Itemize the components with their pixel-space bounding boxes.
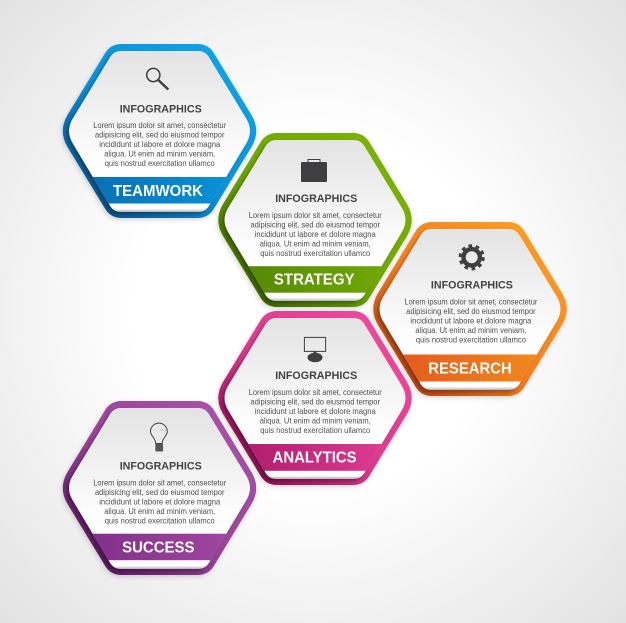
inner shadow [222,320,403,482]
body text: aliqua. Ut enim ad minim veniam, [260,239,371,248]
icon: magnifier [147,68,168,90]
ribbon [92,534,226,560]
icon: briefcase [301,160,327,182]
inner shadow [66,410,248,572]
body text: quis nostrud exercitation ullamco [105,517,215,526]
body text: quis nostrud exercitation ullamco [260,426,371,435]
inner shadow [66,54,248,214]
heading: INFOGRAPHICS [120,461,202,473]
heading: INFOGRAPHICS [120,104,202,116]
inner shadow [222,142,403,304]
inner card [69,408,250,569]
body text: Lorem ipsum dolor sit amet, consectetur [93,121,227,130]
body text: incididunt ut labore et dolore magna [255,230,376,239]
body text: incididunt ut labore et dolore magna [255,407,376,416]
body text: adipisicing elit, sed do eiusmod tempor [250,398,380,406]
body text: quis nostrud exercitation ullamco [416,336,526,345]
body text: incididunt ut labore et dolore magna [99,498,221,506]
body text: Lorem ipsum dolor sit amet, consectetur [93,478,227,488]
ribbon label: RESEARCH [428,361,512,378]
panel: success hexagon [60,401,260,575]
panel: strategy hexagon [215,133,415,307]
icon: gear [460,246,483,269]
hexagon frame [218,133,412,307]
body text: adipisicing elit, sed do eiusmod tempor [406,307,536,316]
body text: quis nostrud exercitation ullamco [260,249,371,258]
body text: aliqua. Ut enim ad minim veniam, [104,150,215,159]
hexagon frame [63,401,256,575]
ribbon label: TEAMWORK [113,183,204,200]
body text: incididunt ut labore et dolore magna [410,316,532,326]
ribbon label: ANALYTICS [273,450,357,467]
ribbon label: STRATEGY [274,272,355,289]
body text [249,388,382,435]
body text: Lorem ipsum dolor sit amet, consectetur [249,211,382,220]
body text: aliqua. Ut enim ad minim veniam, [104,507,215,516]
panel: research hexagon [370,222,570,396]
inner card [380,229,560,390]
heading: INFOGRAPHICS [431,280,513,292]
hexagon frame [373,222,567,396]
ribbon [93,177,226,204]
body text: aliqua. Ut enim ad minim veniam, [260,417,371,426]
body text: adipisicing elit, sed do eiusmod tempor [95,130,225,140]
hexagon frame [218,311,412,485]
inner card [224,318,406,479]
body text: Lorem ipsum dolor sit amet, consectetur [249,388,382,397]
icon: monitor [304,337,326,362]
body text: adipisicing elit, sed do eiusmod tempor [250,220,380,229]
heading: INFOGRAPHICS [275,370,357,382]
body text [404,298,538,345]
heading: INFOGRAPHICS [275,193,357,205]
ribbon label: SUCCESS [122,539,194,556]
body text [93,121,227,168]
ribbon [248,266,382,293]
icon: light bulb [150,423,167,452]
hexagon frame [63,44,256,218]
body text: incididunt ut labore et dolore magna [99,140,221,149]
panel: analytics hexagon [215,311,415,485]
body text: quis nostrud exercitation ullamco [105,159,215,168]
inner card [224,140,406,301]
inner card [69,51,250,212]
inner shadow [377,232,558,392]
body text [249,211,382,258]
panel: teamwork hexagon [60,44,260,218]
body text: aliqua. Ut enim ad minim veniam, [415,326,526,335]
ribbon [248,444,382,471]
ribbon [403,354,537,382]
body text: Lorem ipsum dolor sit amet, consectetur [404,298,538,306]
body text: adipisicing elit, sed do eiusmod tempor [95,488,225,497]
body text [93,478,227,526]
